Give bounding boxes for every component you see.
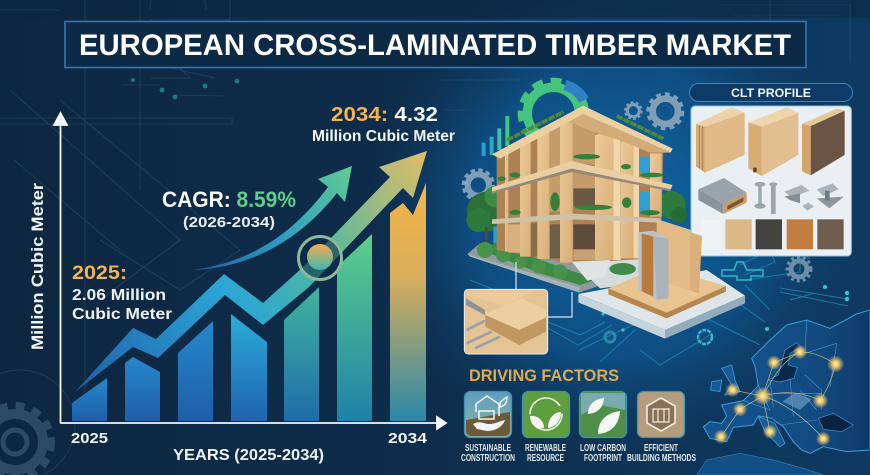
europe map [697,310,870,475]
italy [758,417,785,447]
white base slab [578,270,745,330]
interior walls [549,123,595,212]
balcony plants [498,154,664,215]
bar 2034 [390,183,426,421]
x axis labels: YEARS (2025-2034) [173,447,324,464]
bar 2026 [125,357,160,421]
driving factors labels: RESOURCE [527,453,564,464]
circuit traces [470,250,848,365]
title: EUROPEAN CROSS-LAMINATED TIMBER MARKET [79,29,791,62]
2025 value callout [72,263,172,323]
material swatches [701,219,721,249]
small tech gears [605,257,811,344]
base slabs and clt wall [578,219,745,339]
curved CAGR arrow [193,166,352,270]
column highlights [613,130,639,260]
grass strip [477,243,597,285]
2025 value callout: 2025: [72,263,127,284]
driving factors labels [461,443,696,464]
second floor slab [492,161,673,192]
uk [711,365,740,395]
clt section [638,231,668,299]
2034 value callout [312,104,455,145]
metal brackets [784,183,844,211]
2025 value callout: 2.06 Million [72,287,166,304]
x axis labels: 2034 [388,430,428,447]
background gear [0,370,75,475]
small bushes [609,263,636,275]
land [703,310,870,453]
bushes [477,242,567,279]
bar 2030 [337,234,372,421]
icon: low carbon footprint [580,392,626,438]
black sea [818,413,853,432]
title banner [65,22,806,68]
sky glow [493,227,507,243]
paving [573,258,653,288]
CAGR callout: CAGR: 8.59% [162,187,296,212]
2034 value callout: 2034: 4.32 [331,104,438,126]
border lines [743,320,837,425]
clt profile pill [690,84,852,102]
screws [754,182,777,214]
panel board 1 [696,107,745,173]
connection arcs [721,352,836,439]
grey gears [464,95,682,200]
roof fascia [492,106,673,159]
third floor slab [492,214,661,224]
bar 2025 [72,378,107,421]
panel board 3 [802,109,845,175]
y axis [54,113,67,423]
roof plants [507,112,663,140]
driving factors labels: LOW CARBON [580,443,626,454]
circle marker [298,236,342,280]
green and blue gear [523,83,584,143]
connector line [516,262,572,317]
driving factors labels: SUSTAINABLE [465,443,511,454]
clt profile pill: CLT PROFILE [731,86,811,100]
x axis labels [71,430,428,464]
timber body [497,113,663,263]
bar 2027 [178,321,213,421]
x axis [60,417,446,429]
2025 value callout: Cubic Meter [72,306,172,323]
steel panel [698,178,747,214]
ground floor openings [573,224,595,260]
icon: renewable resource [522,392,570,438]
driving factors labels: RENEWABLE [525,443,566,454]
driving factors labels: EFFICIENT [644,443,678,454]
icon: efficient building methods [638,392,684,438]
bar 2029 [284,287,319,421]
africa coast [697,453,823,475]
highlight country [783,393,812,410]
stairs [572,260,610,281]
trees [466,186,687,247]
timber detail photo [464,289,548,354]
CAGR callout: (2026-2034) [183,214,275,231]
driving factors labels: BUILDING METHODS [627,453,696,464]
y axis label: Million Cubic Meter [28,183,47,350]
roof underside [500,114,671,158]
2034 value callout: Million Cubic Meter [312,128,455,145]
clt wall [657,219,702,293]
wood base slab [608,267,726,313]
CAGR callout [162,187,296,231]
x axis labels: 2025 [71,430,108,447]
mini bar icon [482,116,509,156]
driving factors heading: DRIVING FACTORS [469,366,619,385]
driving factors labels: CONSTRUCTION [461,453,515,464]
baltic sea [768,343,801,382]
line and bar chart [54,113,446,429]
building illustration [492,106,673,281]
terrace edge [467,243,640,293]
wall overlap on panel [690,232,702,293]
driving factors icons [464,392,684,438]
trend arrow [75,151,427,392]
building backdrop: gears, trees and terrace [464,83,687,293]
columns [505,119,662,263]
clt profile panel [691,106,851,256]
driving factors labels: FOOTPRINT [584,453,622,464]
bar 2028 [231,314,267,421]
icon: sustainable construction [464,392,512,438]
panel board 2 [748,107,798,176]
glowing nodes [714,345,844,446]
